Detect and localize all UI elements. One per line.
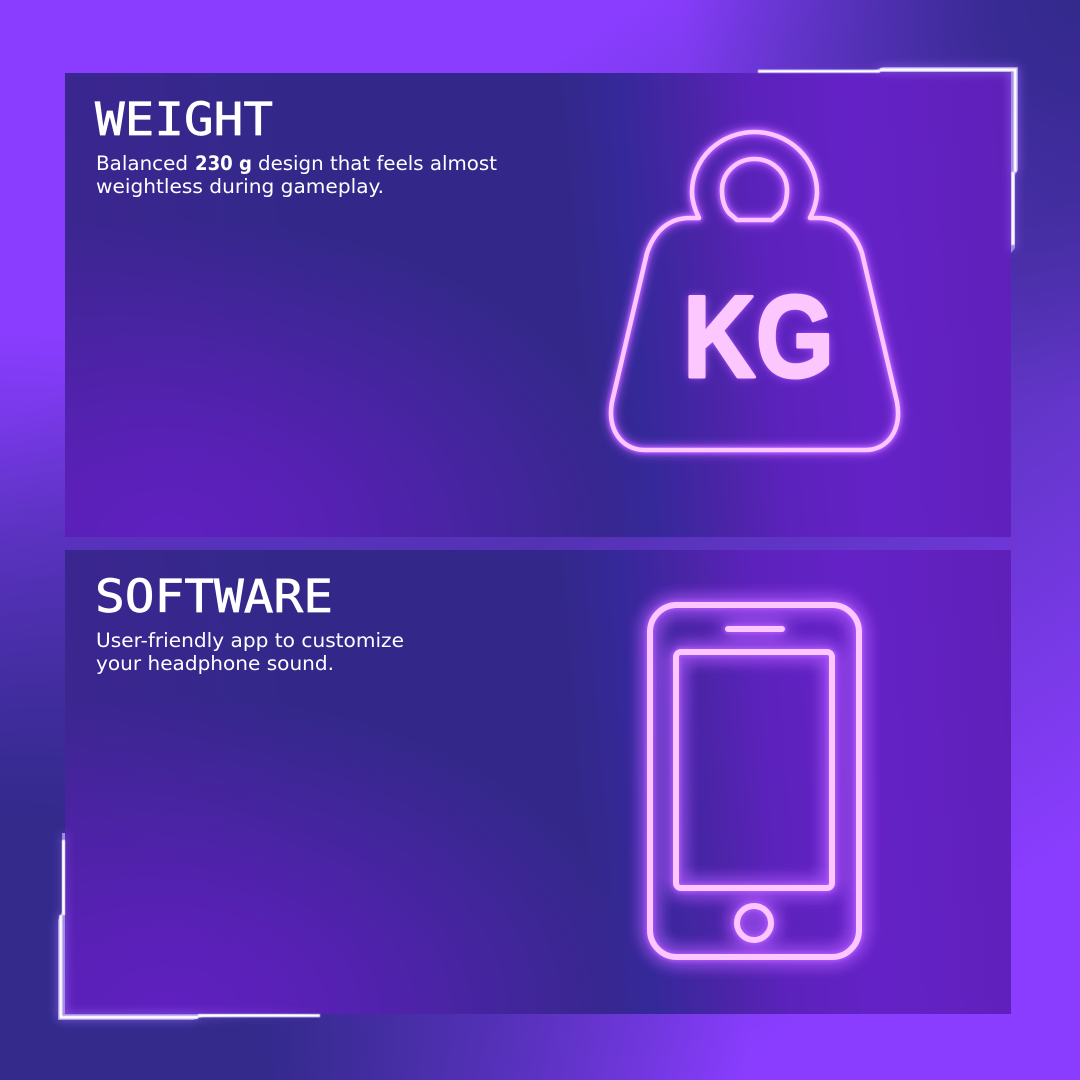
icon glow: weight [611, 132, 898, 450]
text block: software description: User-friendly app to customize [96, 629, 404, 652]
text block: software description [96, 629, 404, 675]
text block: weight description: 230 g [195, 152, 252, 175]
heading: software: SOFTWARE [95, 570, 333, 623]
panel: software [65, 550, 1011, 1014]
text block: weight description [96, 152, 497, 198]
icon glow: weight: KG [683, 271, 834, 402]
label: KG: KG [683, 271, 834, 402]
frame accent: bottom left corner [58, 833, 323, 1020]
panel background: software [65, 550, 1011, 1014]
icon glow: smartphone [650, 605, 859, 957]
panel: weight [65, 73, 1011, 537]
icon outline: weight [611, 132, 898, 450]
text block: weight description: Balanced [96, 152, 188, 175]
text block: weight description: weightless during gameplay. [96, 175, 384, 198]
icon outline: smartphone [650, 605, 859, 957]
frame glow: bottom left corner [58, 833, 323, 1020]
panel background: weight [65, 73, 1011, 537]
text block: software description: your headphone sound. [96, 652, 334, 675]
icon: smartphone [650, 605, 859, 957]
icon: kettlebell weight with KG [611, 132, 898, 450]
heading: weight: WEIGHT [95, 93, 273, 146]
frame accent: top right corner [753, 67, 1018, 253]
text block: weight description: design that feels almost [258, 152, 497, 175]
frame glow: top right corner [753, 67, 1018, 253]
